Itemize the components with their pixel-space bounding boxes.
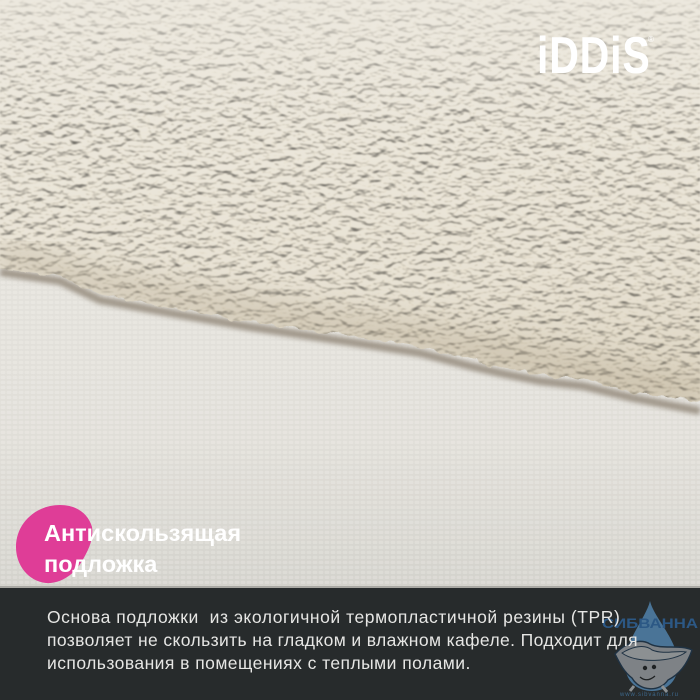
heading: Антискользящая [44,520,241,546]
heading: подложка [44,551,157,577]
woven backing [0,255,700,590]
watermark: santehnika bathtub mascot: www.sibvanna.ru [619,692,678,698]
watermark: santehnika bathtub mascot: СИБВАННА [602,615,698,631]
logo: IDDIS: ® [648,35,654,44]
logo: IDDIS: iDDiS [537,27,651,85]
description text: позволяет не скользить на гладком и влажном кафеле. Подходит для [47,630,638,650]
watermark: santehnika bathtub mascot [602,601,698,698]
pink blob behind heading [16,505,92,584]
base edge highlight [0,586,700,588]
dark description panel [0,588,700,700]
heading [44,520,241,577]
description text [47,607,638,673]
description text: Основа подложки из экологичной термопластичной резины (TPR) [47,607,620,627]
shadow under rug [0,272,700,411]
rug pile [0,0,700,430]
description text: использования в помещениях с теплыми полами. [47,653,471,673]
